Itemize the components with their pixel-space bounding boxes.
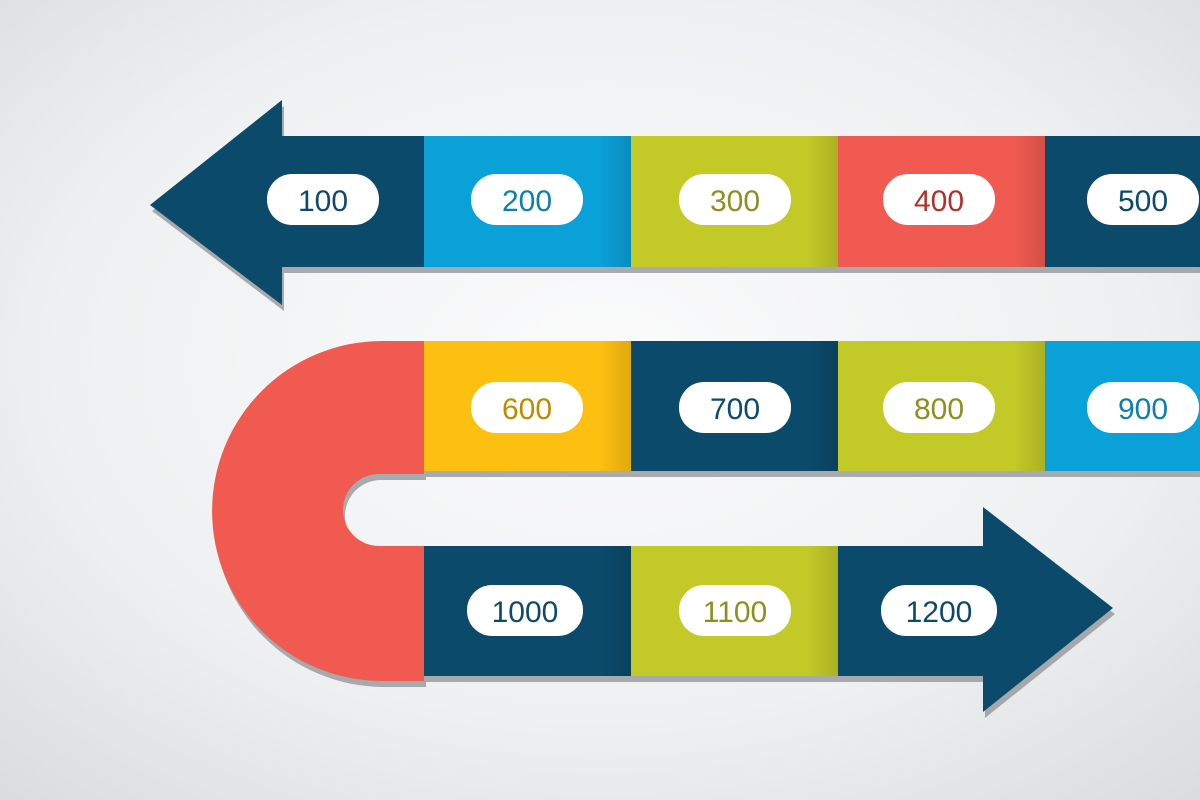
row 3 xyxy=(424,507,1113,712)
pills: 800 xyxy=(914,393,964,426)
pills: 700 xyxy=(710,393,760,426)
pills: 1200 xyxy=(906,596,972,629)
shadows xyxy=(152,106,1200,718)
U-turn red xyxy=(212,341,424,681)
pills xyxy=(267,174,1199,636)
row 2 xyxy=(424,341,1200,471)
pills: 200 xyxy=(502,185,552,218)
pills: 400 xyxy=(914,185,964,218)
arrow head left xyxy=(150,100,1200,305)
pills: 600 xyxy=(502,393,552,426)
pills: 300 xyxy=(710,185,760,218)
pills: 500 xyxy=(1118,185,1168,218)
pills: 900 xyxy=(1118,393,1168,426)
row 1: left arrow band xyxy=(150,100,1200,305)
pills: 1100 xyxy=(703,596,767,629)
pills: 1000 xyxy=(492,596,558,629)
pills: 100 xyxy=(298,185,348,218)
